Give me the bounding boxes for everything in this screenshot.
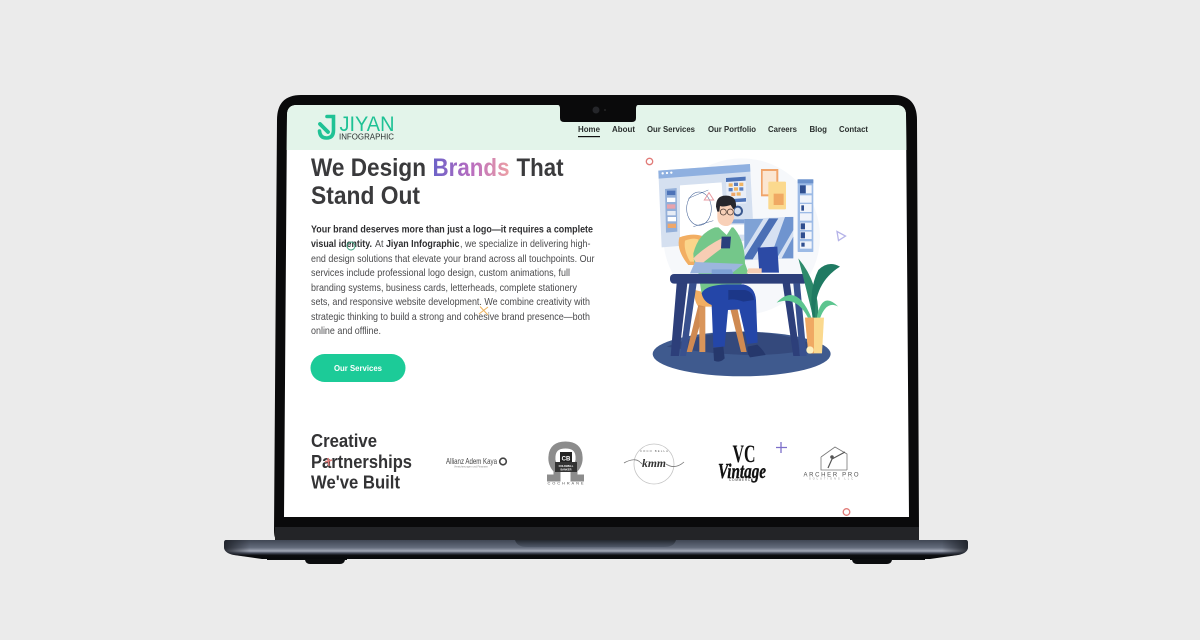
monitor <box>744 217 793 260</box>
logo: VC Vintage <box>718 441 766 483</box>
logo: Coldwell Banker Cochrane: BANKER <box>560 468 572 472</box>
hero paragraph <box>311 224 595 337</box>
tool palette <box>798 179 813 252</box>
hero heading <box>311 154 564 210</box>
tablet and laptop <box>690 247 779 274</box>
shoes <box>713 347 725 362</box>
hero paragraph: Your brand deserves more than just a logo—it requires a complete <box>311 224 593 236</box>
logo: VC Vintage: COMMERCE <box>729 478 753 482</box>
logo: Coldwell Banker Cochrane <box>547 445 584 486</box>
logo: Allianz Adem Kaya: Versicherungen und Finanzen <box>454 464 488 468</box>
hero paragraph: services include professional logo design, custom animations, full <box>311 268 570 279</box>
logo: VC Vintage: Vintage <box>718 459 766 483</box>
plant <box>777 258 840 354</box>
button: Our Services: Our Services <box>334 363 382 373</box>
logo: kmm <box>624 444 684 484</box>
head <box>717 205 734 226</box>
legs <box>702 284 758 347</box>
hero heading: That <box>516 154 564 182</box>
logo: Archer Pro <box>804 447 859 480</box>
logo: Allianz Adem Kaya: Allianz Adem Kaya <box>446 456 497 466</box>
laptop feet <box>267 556 925 564</box>
floating decorations <box>325 158 850 515</box>
floor shadow <box>653 332 831 376</box>
navigation: Our Portfolio <box>708 124 756 134</box>
partnerships heading: Partnerships <box>311 452 412 472</box>
desk <box>670 274 808 356</box>
laptop lid bezel <box>274 95 919 541</box>
laptop base <box>224 540 968 559</box>
navigation: Our Services <box>647 124 695 134</box>
logo: kmm: COCO BELLA <box>640 449 668 453</box>
logo: Archer Pro: SOLUTIONS LLC <box>809 478 853 480</box>
screen <box>284 105 909 517</box>
partnerships heading <box>311 431 412 492</box>
logo subtitle: INFOGRAPHIC <box>339 132 394 142</box>
camera notch <box>558 105 638 122</box>
logo: VC Vintage: VC <box>732 441 756 468</box>
logo wordmark: JIYAN <box>340 112 394 136</box>
hero paragraph: visual identity. <box>311 239 372 250</box>
hero paragraph: strategic thinking to build a strong and cohesive brand presence—both <box>311 312 590 323</box>
partnerships heading: Creative <box>311 431 377 451</box>
logo: Coldwell Banker Cochrane: COCHRANE <box>548 480 584 486</box>
logo mark <box>320 116 334 138</box>
navigation: About <box>612 124 635 134</box>
hinge <box>275 527 919 540</box>
screen background <box>284 105 909 517</box>
chair <box>679 235 747 352</box>
backdrop blob <box>663 158 820 315</box>
laptop <box>224 95 968 564</box>
logo: Archer Pro: ARCHER PRO <box>804 472 859 478</box>
navigation <box>578 124 868 137</box>
partnerships heading: We've Built <box>311 472 400 492</box>
design window <box>658 164 754 247</box>
hero paragraph: , we specialize in delivering high- <box>460 239 590 250</box>
logo: kmm: kmm <box>642 456 666 470</box>
logo <box>320 112 394 142</box>
hero paragraph: branding systems, business cards, letterheads, complete stationery <box>311 283 578 294</box>
illustration: designer at desk <box>653 158 840 376</box>
hero heading: Brands <box>432 154 510 182</box>
navigation: Careers <box>768 124 797 134</box>
button: Our Services <box>310 354 406 382</box>
navigation: Contact <box>839 124 868 134</box>
header bar <box>287 105 906 150</box>
hero heading: Stand Out <box>311 182 421 210</box>
shirt <box>693 227 748 294</box>
logo: Coldwell Banker Cochrane: CB <box>562 456 571 462</box>
hero paragraph: online and offline. <box>311 326 381 337</box>
designer <box>693 196 766 362</box>
arm and cup <box>693 238 724 267</box>
hero paragraph: sets, and responsive website development. We combine creativity with <box>311 297 590 308</box>
partner logos <box>446 441 859 486</box>
hero paragraph: At <box>375 239 384 250</box>
orange cards <box>761 169 786 209</box>
logo: Coldwell Banker Cochrane: COLDWELL <box>559 464 574 468</box>
hero heading: We Design <box>311 154 426 182</box>
navigation: Blog <box>810 124 827 134</box>
hero paragraph: end design solutions that elevate your brand across all touchpoints. Our <box>311 254 595 265</box>
navigation: Home <box>578 124 600 134</box>
trackpad lip <box>515 540 676 547</box>
hero paragraph: Jiyan Infographic <box>386 239 460 250</box>
